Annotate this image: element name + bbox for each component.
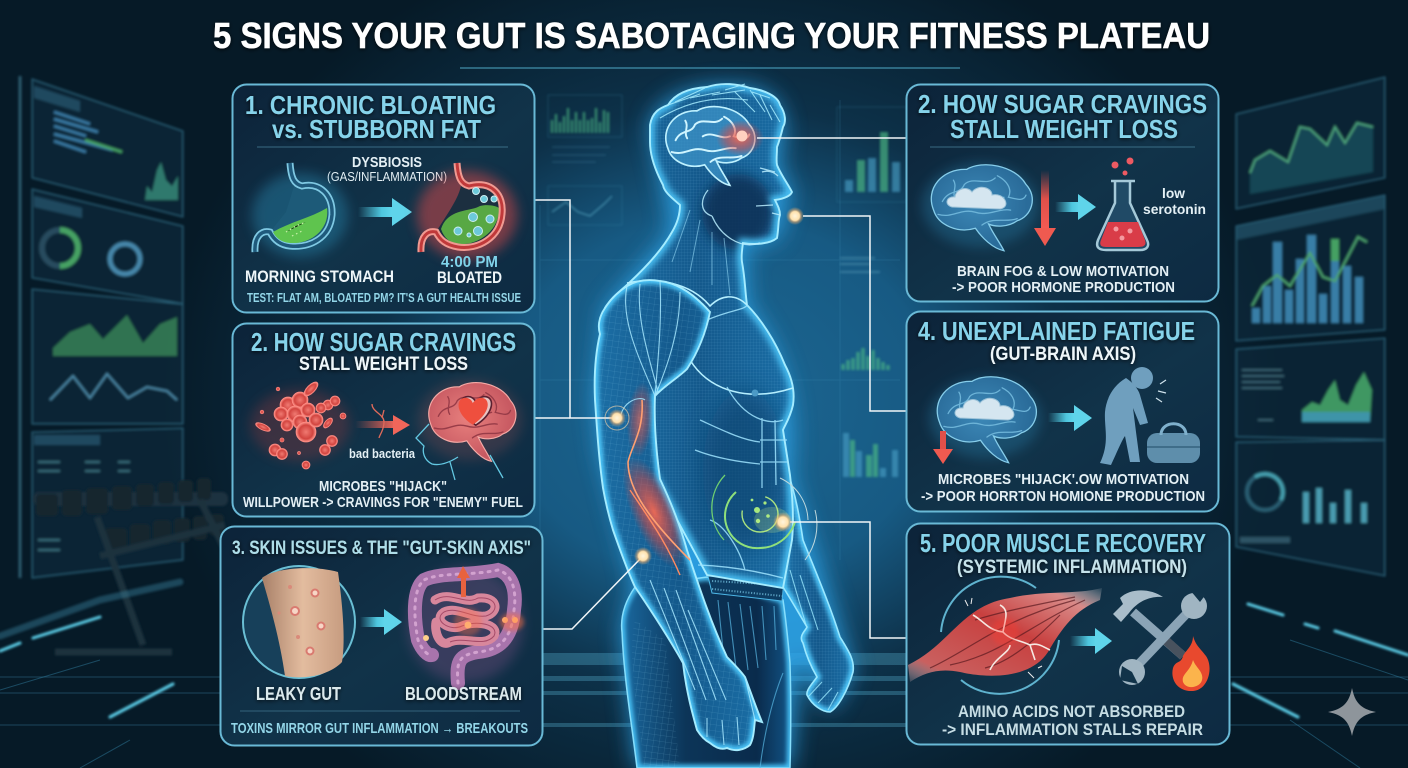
card 1 captions	[245, 254, 502, 287]
body glow	[595, 87, 853, 768]
right card 2 caption	[952, 263, 1175, 296]
icon: foggy brain	[929, 377, 1041, 463]
card 1 captions: BLOATED	[437, 268, 502, 287]
icon: red down arrow	[1034, 170, 1056, 246]
floor light streaks	[0, 582, 1408, 717]
arrow	[360, 609, 402, 635]
card 1 heading: vs. STUBBORN FAT	[272, 114, 481, 144]
card 3 captions: LEAKY GUT	[256, 684, 341, 704]
near arm	[595, 280, 762, 750]
gut radar rings	[712, 475, 817, 560]
dumbbell rack	[33, 478, 228, 652]
dysbiosis label: DYSBIOSIS	[352, 154, 422, 171]
title: 5 SIGNS YOUR GUT IS SABOTAGING YOUR FITNESS PLATEAU	[213, 15, 1210, 56]
far arm	[783, 470, 853, 712]
card 1 heading: 1. CHRONIC BLOATING	[245, 90, 496, 120]
card 3 frame	[220, 526, 542, 746]
card 1 captions: MORNING STOMACH	[245, 267, 394, 286]
dysbiosis label	[327, 154, 447, 184]
right card 2 caption: BRAIN FOG & LOW MOTIVATION	[957, 263, 1169, 280]
central background charts	[548, 95, 907, 477]
card 3 heading: 3. SKIN ISSUES & THE "GUT-SKIN AXIS"	[232, 538, 531, 559]
connector lines	[525, 138, 906, 638]
card 5 caption: -> INFLAMMATION STALLS REPAIR	[942, 720, 1203, 739]
collar and chest lines	[627, 281, 793, 394]
serotonin label: serotonin	[1143, 201, 1206, 217]
panel 2: sugar cravings right	[906, 84, 1218, 302]
abdomen muscles	[695, 305, 788, 578]
card 5 heading: 5. POOR MUSCLE RECOVERY	[920, 528, 1206, 558]
card 5 caption	[942, 702, 1203, 739]
arrow	[358, 198, 412, 226]
panel 2: sugar cravings left	[232, 324, 534, 516]
brain in head	[666, 107, 764, 185]
dysbiosis label: (GAS/INFLAMMATION)	[327, 169, 447, 184]
arrow	[1055, 194, 1096, 220]
card 1 frame	[232, 84, 534, 312]
icon: bloated stomach	[417, 163, 517, 259]
card 4 heading	[918, 316, 1195, 365]
card 3 captions	[256, 684, 522, 704]
legs and shorts	[622, 576, 791, 768]
serotonin label	[1143, 185, 1206, 217]
card 5 caption: AMINO ACIDS NOT ABSORBED	[958, 702, 1185, 721]
title underline	[460, 67, 960, 69]
arrow	[1070, 628, 1112, 654]
card 1 captions: 4:00 PM	[441, 254, 498, 271]
inflamed forearm	[624, 458, 684, 566]
icon: torn muscle	[908, 577, 1102, 694]
icon: flask	[1097, 158, 1148, 250]
card 4 caption	[921, 471, 1205, 505]
icon: foggy brain	[922, 163, 1038, 251]
icon: small red arrow	[933, 431, 953, 464]
card 3 captions: BLOODSTREAM	[405, 684, 522, 704]
card 2 caption: WILLPOWER -> CRAVINGS FOR "ENEMY" FUEL	[243, 494, 523, 511]
torso and head	[605, 84, 794, 588]
card 2 frame	[232, 324, 534, 516]
card 5 frame	[906, 524, 1230, 744]
card 2 heading: 2. HOW SUGAR CRAVINGS	[251, 327, 516, 357]
inner leg lines	[718, 600, 783, 768]
card 4 caption: MICROBES "HIJACK'.OW MOTIVATION	[938, 471, 1189, 488]
body wireframe grid	[639, 87, 790, 582]
serotonin label: low	[1162, 185, 1185, 201]
card 5 heading: (SYSTEMIC INFLAMMATION)	[957, 557, 1187, 578]
icon: red arrow	[355, 404, 410, 438]
bacteria label: bad bacteria	[349, 446, 416, 461]
card 1 test note: TEST: FLAT AM, BLOATED PM? IT'S A GUT HEALTH ISSUE	[247, 290, 521, 305]
marker dots	[605, 207, 804, 565]
panel 3: skin issues	[220, 526, 542, 746]
right card 2 heading: 2. HOW SUGAR CRAVINGS	[918, 89, 1207, 119]
card 5 heading	[920, 528, 1206, 578]
icon: bad bacteria	[250, 380, 350, 469]
card 2 heading	[251, 327, 516, 375]
card 2 heading: STALL WEIGHT LOSS	[299, 354, 468, 375]
card 4 frame	[906, 312, 1218, 512]
card 1 heading	[245, 90, 496, 144]
icon: skin circle	[243, 566, 355, 678]
card 3 note: TOXINS MIRROR GUT INFLAMMATION → BREAKOUTS	[231, 720, 528, 737]
right card 2 heading: STALL WEIGHT LOSS	[950, 114, 1178, 144]
hair strands	[660, 84, 780, 122]
thigh grid	[632, 620, 680, 768]
icon: tired person with bag	[1100, 367, 1200, 465]
arm wireframe grid	[595, 280, 762, 750]
right card 2 caption: -> POOR HORMONE PRODUCTION	[952, 279, 1175, 296]
icon: brain with heart	[416, 380, 522, 480]
right card 2 frame	[906, 84, 1218, 302]
icon: fire	[1172, 636, 1210, 691]
left background dashboard	[20, 76, 183, 578]
right card 2 heading	[918, 89, 1207, 144]
card 2 caption: MICROBES "HIJACK"	[319, 478, 447, 495]
figure: transparent human body	[595, 84, 853, 768]
panel 5: poor muscle recovery	[906, 524, 1230, 744]
icon: hammer and wrench	[1113, 590, 1207, 685]
arrow	[1048, 405, 1092, 431]
card 2 caption	[243, 478, 523, 511]
face features	[702, 168, 780, 245]
card 4 heading: 4. UNEXPLAINED FATIGUE	[918, 316, 1195, 346]
icon: intestines	[407, 566, 524, 683]
watermark star	[1328, 688, 1376, 736]
icon: morning stomach	[252, 163, 348, 257]
right background dashboard	[1236, 77, 1385, 576]
arm muscle lines	[620, 281, 755, 745]
card 4 heading: (GUT-BRAIN AXIS)	[990, 344, 1136, 365]
panel 4: unexplained fatigue	[906, 312, 1218, 512]
nipple	[752, 390, 758, 396]
card 4 caption: -> POOR HORRTON HOMIONE PRODUCTION	[921, 488, 1205, 505]
panel 1: chronic bloating	[232, 84, 534, 312]
waistband	[708, 576, 784, 601]
neck lines	[672, 210, 730, 295]
